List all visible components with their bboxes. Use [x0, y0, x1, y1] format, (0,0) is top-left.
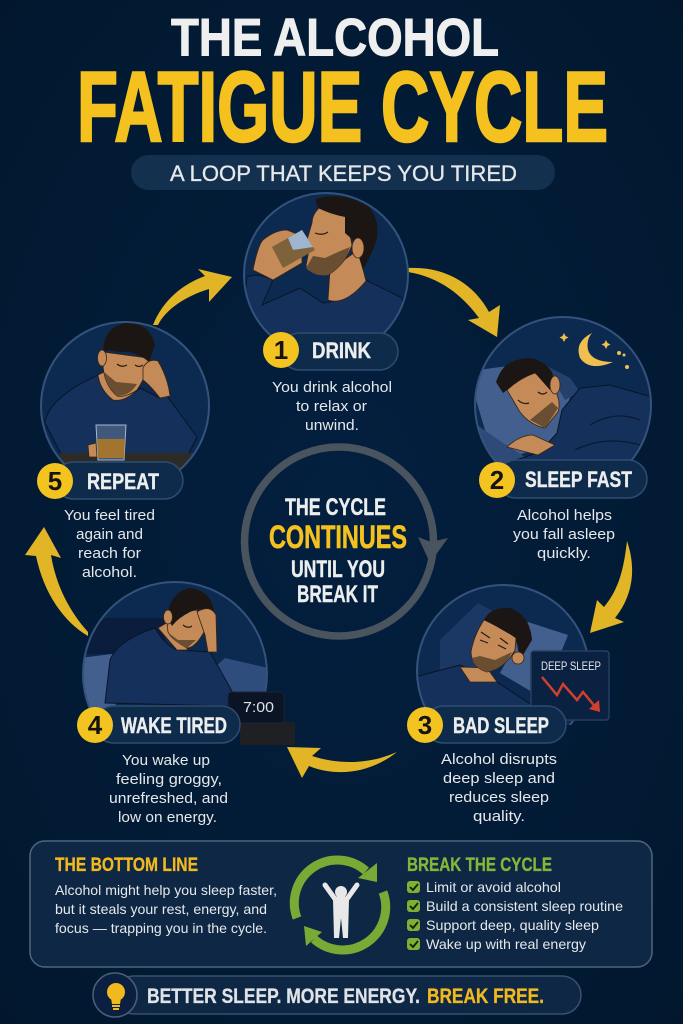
- text: bottom line body: but it steals your rest, energy, and: [55, 901, 267, 917]
- icon: light bulb: [93, 973, 137, 1017]
- description: wake tired: low on energy.: [118, 809, 217, 826]
- text: banner slogan: BETTER SLEEP. MORE ENERGY.: [147, 985, 420, 1008]
- label: drink: [263, 332, 398, 370]
- panel: bottom line and break the cycle: [30, 841, 652, 967]
- description: wake tired: feeling groggy,: [116, 771, 222, 788]
- subtitle pill: [131, 155, 555, 190]
- heading: the bottom line: THE BOTTOM LINE: [55, 855, 198, 876]
- step 5: repeat: [37, 322, 209, 581]
- checklist: Limit or avoid alcohol: [426, 879, 561, 895]
- center ring arrow: [244, 447, 448, 636]
- label: wake tired: 4: [88, 710, 103, 740]
- description: repeat: reach for: [78, 545, 141, 562]
- icon: alarm clock on nightstand: 7:00: [243, 699, 274, 716]
- text: bottom line body: focus — trapping you in the cycle.: [55, 920, 267, 936]
- icon: alarm clock on nightstand: [228, 692, 295, 745]
- label: bad sleep: BAD SLEEP: [453, 713, 549, 738]
- label: repeat: REPEAT: [87, 469, 159, 494]
- title: [77, 8, 608, 162]
- center message: [269, 494, 407, 608]
- subtitle pill: A LOOP THAT KEEPS YOU TIRED: [170, 161, 517, 186]
- arrow: bad sleep to wake tired: [287, 747, 397, 778]
- description: drink: You drink alcohol: [272, 379, 392, 396]
- description: bad sleep: [441, 751, 557, 825]
- description: drink: to relax or: [296, 398, 367, 415]
- chart: deep sleep falling: [531, 651, 609, 720]
- description: bad sleep: quality.: [473, 808, 525, 825]
- step 3: bad sleep: [407, 585, 609, 825]
- step 2: sleep fast: [470, 317, 660, 562]
- description: bad sleep: reduces sleep: [449, 789, 549, 806]
- description: repeat: [64, 507, 155, 581]
- label: wake tired: [77, 706, 240, 743]
- chart: deep sleep falling: DEEP SLEEP: [541, 659, 601, 673]
- label: repeat: [37, 462, 183, 499]
- illustration: man drinking: [243, 192, 409, 336]
- description: wake tired: [109, 752, 228, 826]
- checklist: Support deep, quality sleep: [426, 917, 599, 933]
- icon: green cycle with person: [294, 860, 386, 950]
- label: bad sleep: 3: [418, 710, 432, 740]
- description: repeat: alcohol.: [82, 564, 137, 581]
- arrow: repeat to drink: [153, 269, 232, 325]
- description: repeat: You feel tired: [64, 507, 155, 524]
- text: bottom line body: [55, 882, 277, 936]
- description: sleep fast: you fall asleep: [513, 526, 615, 543]
- label: sleep fast: [479, 460, 647, 498]
- illustration: man waking tired: [82, 581, 268, 709]
- description: sleep fast: Alcohol helps: [517, 507, 612, 524]
- title: THE ALCOHOL: [171, 8, 499, 68]
- description: sleep fast: [513, 507, 615, 562]
- description: wake tired: unrefreshed, and: [109, 790, 228, 807]
- label: bad sleep: [407, 706, 566, 743]
- text: banner slogan: BREAK FREE.: [427, 985, 544, 1008]
- description: drink: unwind.: [305, 417, 359, 434]
- center message: UNTIL YOU: [291, 556, 385, 583]
- label: wake tired: WAKE TIRED: [121, 713, 227, 738]
- center message: BREAK IT: [297, 581, 378, 608]
- checklist: Build a consistent sleep routine: [426, 898, 623, 914]
- illustration: man sleeping with moon: [474, 316, 652, 464]
- label: drink: 1: [274, 335, 288, 365]
- arrow: drink to sleep fast: [408, 268, 500, 337]
- checklist: [407, 879, 623, 952]
- description: repeat: again and: [76, 526, 143, 543]
- checklist: Wake up with real energy: [426, 936, 586, 952]
- step 4: wake tired: [77, 582, 295, 826]
- description: wake tired: You wake up: [122, 752, 210, 769]
- illustration: man lying awake: [416, 584, 588, 725]
- center message: CONTINUES: [269, 519, 407, 555]
- text: bottom line body: Alcohol might help you sleep faster,: [55, 882, 277, 898]
- description: sleep fast: quickly.: [537, 545, 591, 562]
- description: bad sleep: Alcohol disrupts: [441, 751, 557, 768]
- description: drink: [272, 379, 392, 434]
- label: sleep fast: 2: [490, 465, 504, 495]
- description: bad sleep: deep sleep and: [443, 770, 555, 787]
- arrow: sleep fast to bad sleep: [590, 541, 632, 633]
- heading: break the cycle: BREAK THE CYCLE: [407, 855, 552, 876]
- footer banner: [93, 973, 581, 1017]
- step 1: drink: [240, 193, 412, 434]
- arrow: wake tired to repeat: [25, 527, 88, 636]
- label: repeat: 5: [48, 466, 62, 496]
- label: sleep fast: SLEEP FAST: [525, 467, 632, 492]
- center message: THE CYCLE: [285, 494, 386, 521]
- label: drink: DRINK: [312, 338, 371, 363]
- illustration: man with whiskey glass: [40, 321, 210, 470]
